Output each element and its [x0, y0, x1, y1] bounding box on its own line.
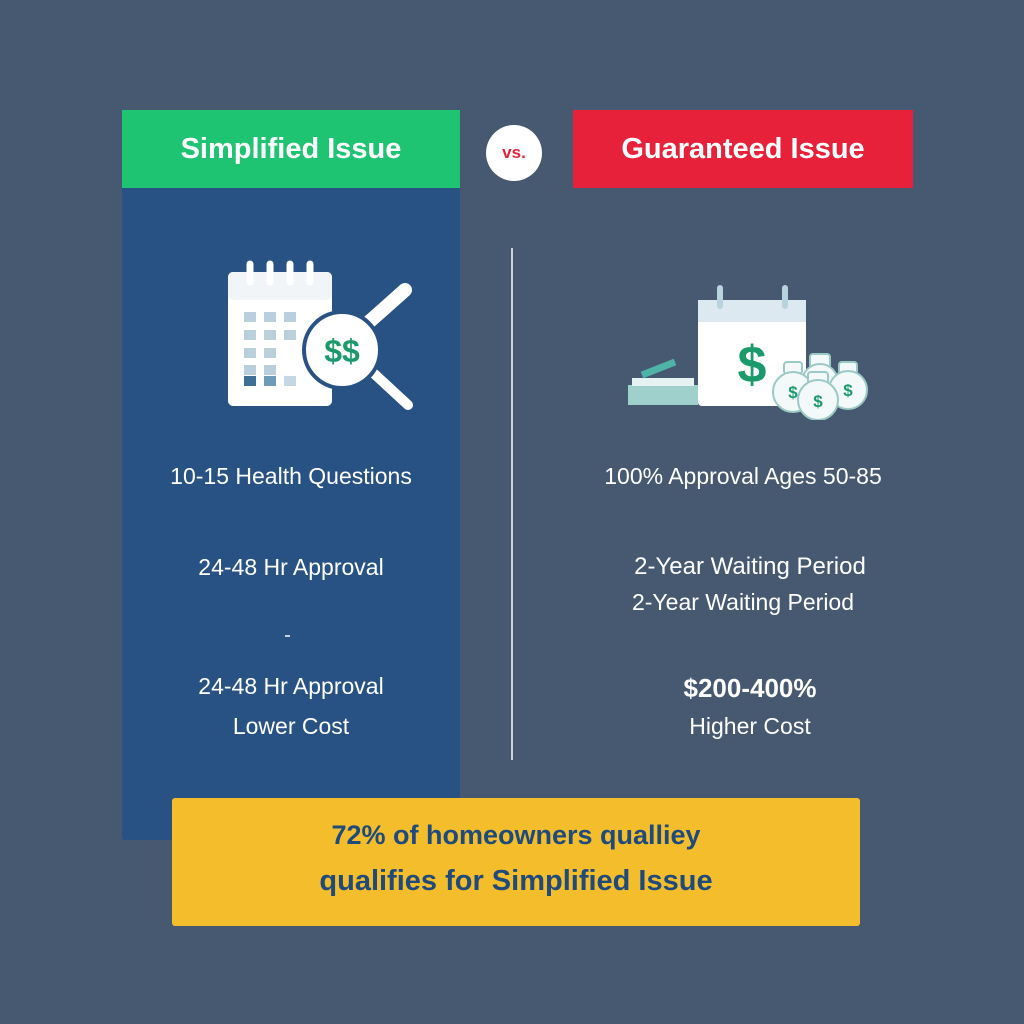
icon: calendar with money bags: $: [843, 381, 853, 400]
vs badge: vs.: [502, 143, 526, 162]
callout: statistic: qualifies for Simplified Issue: [319, 865, 713, 897]
icon: calendar with money bags: $: [788, 383, 798, 402]
icon: calendar with money bags: $: [738, 336, 767, 394]
panel: simplified issue: [122, 110, 460, 840]
text: Lower Cost: [233, 713, 349, 739]
icon: calendar with money bags: [628, 285, 868, 420]
text: right items: 100% Approval Ages 50-85: [604, 463, 882, 489]
text: Higher Cost: [689, 713, 811, 739]
heading: guaranteed issue: [573, 110, 913, 188]
icon: calendar with money bags: $: [813, 392, 823, 411]
text: left items: 10-15 Health Questions: [170, 463, 412, 489]
text: 2-Year Waiting Period: [634, 553, 866, 580]
vs badge: [486, 125, 542, 181]
heading: guaranteed issue: Guaranteed Issue: [621, 133, 865, 165]
text: $200-400%: [684, 673, 816, 703]
text: 2-Year Waiting Period: [632, 589, 854, 615]
text: 24-48 Hr Approval: [198, 554, 384, 580]
text: 24-48 Hr Approval: [198, 673, 384, 699]
callout: statistic: 72% of homeowners qualliey: [331, 820, 701, 850]
icon: calendar with magnifier: [228, 260, 413, 410]
heading: simplified issue: Simplified Issue: [181, 133, 401, 165]
heading: simplified issue: [122, 110, 460, 188]
callout: statistic: [172, 798, 860, 926]
icon: calendar with magnifier: $$: [324, 333, 360, 369]
